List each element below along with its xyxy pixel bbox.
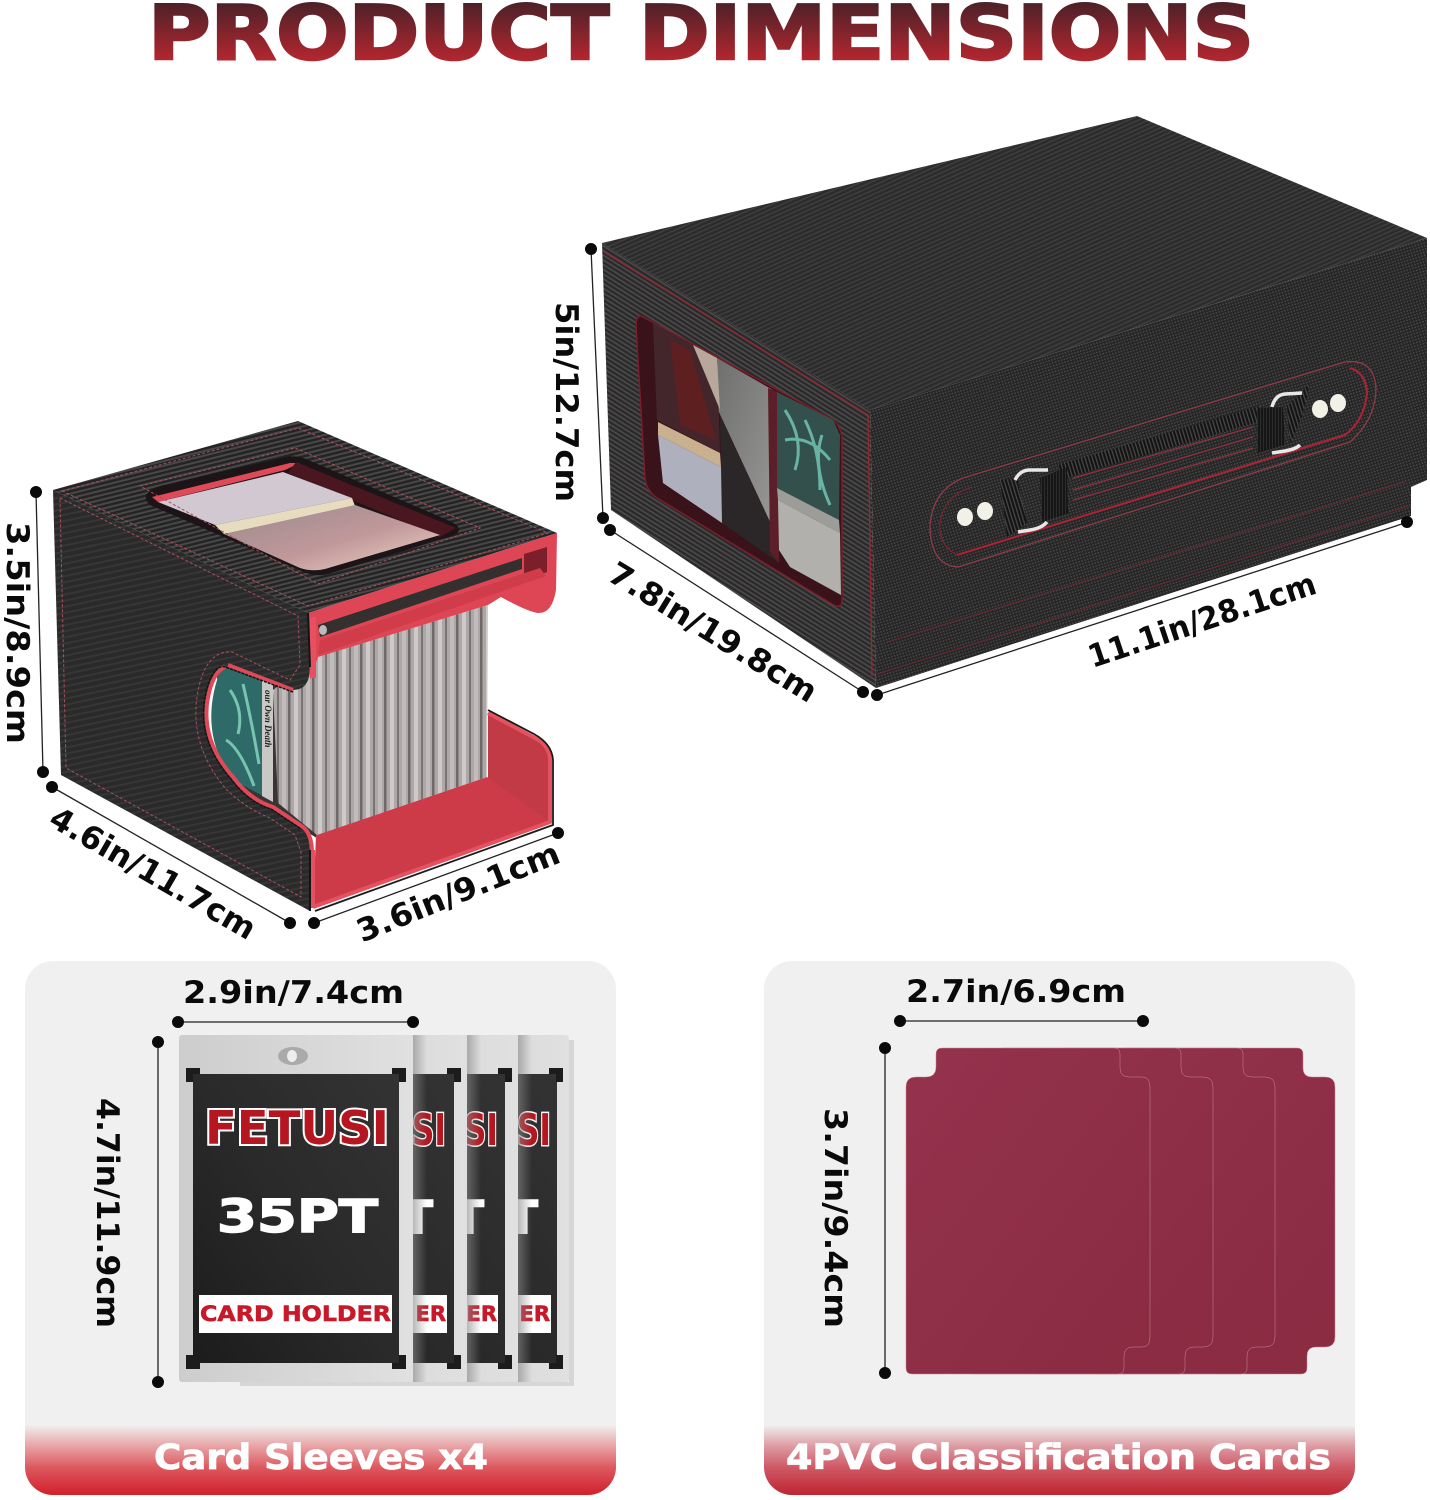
deck box: side stitching	[60, 498, 301, 897]
sleeve 3 shade	[518, 1035, 532, 1382]
left rivets	[957, 502, 993, 526]
sleeve 3 bar	[446, 1295, 498, 1333]
handle bright stitch	[957, 368, 1367, 555]
label: 3.5in/8.9cm: 3.5in/8.9cm	[0, 522, 35, 744]
lower stitching	[878, 482, 1411, 674]
sleeve 3	[285, 1035, 532, 1382]
sleeve 2 logo: SI	[412, 1105, 446, 1156]
deck box: top face	[53, 421, 557, 613]
deck box: top window rim	[146, 456, 459, 575]
deck box: card edge title: our Own Death	[263, 690, 273, 748]
label: 3.7in/9.4cm: 3.7in/9.4cm	[817, 1108, 853, 1328]
deck box: slot side opening	[524, 547, 547, 580]
left card figure light	[693, 345, 720, 410]
divider card 3	[1029, 1048, 1275, 1374]
sleeve 4	[335, 1035, 569, 1382]
sleeve 1 dark panel	[193, 1074, 399, 1363]
sleeve 1 bar	[199, 1295, 392, 1333]
handle outer stitching	[930, 362, 1376, 567]
label: 3.6in/9.1cm: 3.6in/9.1cm	[351, 836, 565, 950]
dimension lines: small box	[30, 486, 564, 929]
label: 11.1in/28.1cm: 11.1in/28.1cm	[1084, 566, 1321, 676]
sleeve 4 logo: SI	[517, 1105, 551, 1156]
label: 2.9in/7.4cm: 2.9in/7.4cm	[183, 975, 404, 1011]
sleeve 2 clips	[447, 1068, 461, 1369]
width dots	[894, 1015, 1149, 1027]
left card text	[658, 435, 722, 523]
sleeve 4 dark panel	[349, 1074, 557, 1363]
right card tentacles	[785, 410, 830, 505]
sleeve 4 body	[335, 1035, 569, 1382]
height line	[36, 492, 43, 772]
sleeve 3 dark panel	[299, 1074, 505, 1363]
right buckle ring	[1272, 393, 1302, 453]
right rivets	[1312, 394, 1346, 418]
width line	[314, 833, 558, 923]
width line	[900, 1020, 1143, 1022]
deck box: front dark edge	[308, 613, 310, 911]
dimension lines: large box	[585, 243, 1413, 701]
sleeve 3 logo: SI	[464, 1105, 498, 1156]
deck box: slot	[318, 558, 522, 637]
deck box: card stack	[273, 605, 488, 835]
sleeve 1 shade	[413, 1035, 427, 1382]
left card art	[653, 323, 720, 453]
height dots	[879, 1042, 891, 1379]
sleeve 2 35PT: T	[402, 1191, 433, 1244]
height line	[591, 249, 603, 518]
handle long stitches	[1073, 427, 1253, 500]
deck box: window stitching	[140, 448, 480, 584]
sleeve 4 clips	[549, 1068, 563, 1369]
panel background	[764, 961, 1355, 1495]
deck box: back wall	[488, 713, 550, 824]
height dots	[152, 1036, 164, 1388]
deck box: rail lower band	[318, 568, 546, 655]
end dots	[585, 243, 1413, 701]
divider card 2	[967, 1048, 1213, 1374]
end dots	[30, 486, 564, 929]
deck box: cut-out dark edge	[203, 667, 301, 829]
divider card 1	[906, 1048, 1150, 1374]
sleeve 1 text: CARD HOLDER	[200, 1302, 391, 1326]
width dimension	[894, 1015, 1149, 1027]
deck box: wall rim bright	[313, 713, 550, 907]
height dimension	[152, 1036, 164, 1388]
sleeve 4 35PT: T	[507, 1191, 538, 1244]
panel bottom band	[764, 1425, 1355, 1495]
deck box: top stitching	[62, 428, 548, 606]
sleeve shadow	[240, 1040, 574, 1386]
sleeve 1 35PT: 35PT	[217, 1190, 378, 1243]
right card band	[777, 488, 840, 533]
panel: classification cards	[764, 961, 1355, 1495]
sleeve 3 35PT: T	[453, 1191, 484, 1244]
deck box: side face	[53, 490, 310, 911]
sleeve 2	[233, 1035, 481, 1382]
sleeve 3 text: ER	[466, 1302, 497, 1326]
width line	[178, 1021, 413, 1023]
sleeve 2 dark panel	[248, 1074, 454, 1363]
sleeve 4 bar	[500, 1295, 551, 1333]
width dimension	[172, 1016, 419, 1028]
box: top face	[602, 116, 1427, 410]
right card border	[768, 388, 779, 563]
width dots	[172, 1016, 419, 1028]
sleeve 2 bar	[395, 1295, 447, 1333]
left buckle strap	[1040, 467, 1068, 522]
sleeve 1 body	[179, 1035, 413, 1382]
box: left face	[602, 243, 876, 688]
left card red figure	[670, 340, 716, 440]
label: 4.7in/11.9cm: 4.7in/11.9cm	[89, 1098, 125, 1328]
panel caption: 4PVC Classification Cards	[786, 1438, 1331, 1478]
handle inner stitch	[940, 487, 972, 555]
left face red edge stitching	[604, 252, 872, 676]
deck box: teal card in cut-out	[211, 666, 263, 796]
label: 2.7in/6.9cm: 2.7in/6.9cm	[906, 974, 1126, 1010]
deck box: top window red edge	[152, 463, 300, 502]
window grey sheen	[717, 358, 777, 537]
label: 5in/12.7cm: 5in/12.7cm	[548, 302, 584, 502]
panel: card sleeves	[25, 961, 616, 1495]
depth line	[610, 530, 863, 692]
right strap end	[1287, 383, 1310, 443]
panel bottom band	[25, 1425, 616, 1495]
left face window	[636, 316, 842, 606]
depth line	[52, 787, 290, 923]
panel caption: Card Sleeves x4	[154, 1438, 488, 1478]
large storage box	[602, 116, 1427, 688]
label: 7.8in/19.8cm: 7.8in/19.8cm	[602, 555, 823, 710]
handle strap	[1060, 413, 1262, 472]
window black divider	[720, 415, 779, 563]
height line	[884, 1048, 886, 1373]
right buckle strap	[1257, 407, 1285, 453]
deck box: front red edge lower	[309, 850, 315, 908]
sleeve 1 screw	[278, 1047, 308, 1065]
height dimension	[879, 1042, 891, 1379]
deck box: front red edge upper	[310, 617, 316, 678]
deck box: top rail	[308, 533, 557, 680]
deck box: window dark inset	[288, 462, 456, 537]
sleeve 2 shade	[467, 1035, 481, 1382]
deck box: wall outer dark edge	[315, 710, 553, 911]
deck box: card upper	[158, 472, 352, 525]
width line	[877, 522, 1408, 695]
sleeve 3 body	[285, 1035, 518, 1382]
left buckle ring	[1015, 470, 1048, 532]
label: 4.6in/11.7cm: 4.6in/11.7cm	[43, 800, 262, 947]
deck box: cut-out red edge	[206, 665, 312, 850]
sleeve 1 front	[179, 1035, 427, 1382]
height line	[157, 1042, 159, 1382]
window frame	[636, 316, 842, 606]
sleeve 1 corner clips	[186, 1068, 406, 1369]
small deck box	[53, 421, 557, 911]
right card text	[778, 500, 841, 595]
deck box: card band	[215, 498, 355, 534]
sleeve 3 clips	[498, 1068, 512, 1369]
divider card 4	[1089, 1048, 1335, 1374]
rivets	[957, 394, 1346, 526]
sleeve 1 logo: FETUSI	[205, 1101, 389, 1155]
left card band	[658, 422, 721, 467]
panel background	[25, 961, 616, 1495]
deck box: floor	[313, 777, 550, 907]
deck box: cut-out backing	[215, 640, 320, 840]
sleeve 1 screw center	[287, 1050, 297, 1062]
deck box: teal swirls	[226, 684, 259, 786]
sleeve 2 text: ER	[415, 1302, 446, 1326]
sleeve 4 text: ER	[519, 1302, 550, 1326]
deck box: card art	[224, 505, 440, 570]
left strap end	[1000, 478, 1027, 537]
right card art	[777, 392, 840, 520]
deck box: slot silver tip	[319, 625, 327, 635]
sleeve 2 body	[233, 1035, 467, 1382]
box: right face	[870, 238, 1427, 688]
deck box: card edge	[262, 680, 273, 802]
